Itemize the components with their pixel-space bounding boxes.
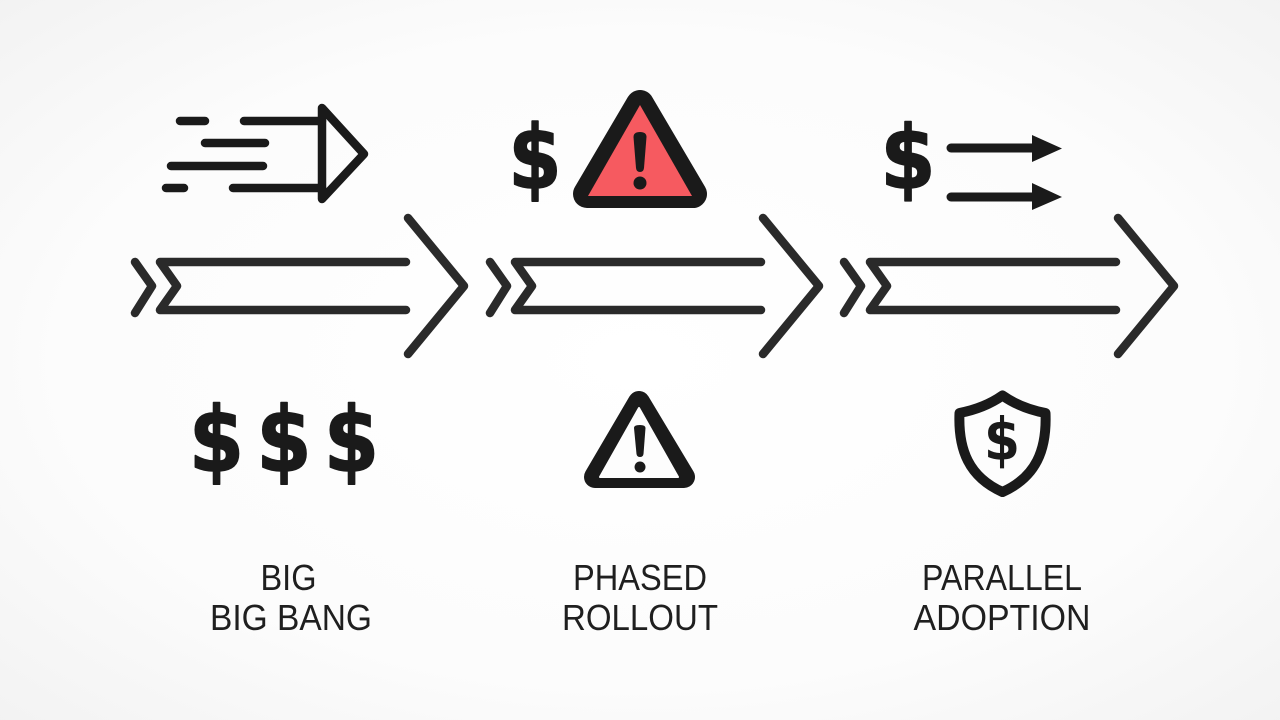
icon: dollar and parallel arrows: [880, 107, 1062, 210]
icon: fast arrow with speed lines: [166, 108, 364, 199]
arrow: parallel adoption stage: [844, 218, 1174, 354]
label: phased rollout: PHASED: [573, 557, 707, 598]
icon: shield with dollar: $: [984, 405, 1020, 474]
icon: shield with dollar: [959, 396, 1046, 492]
icon: dollar and red warning triangle: [508, 104, 693, 209]
label: parallel adoption: PARALLEL: [922, 557, 1082, 598]
arrow: big bang stage: [135, 218, 464, 354]
label: phased rollout: ROLLOUT: [562, 597, 718, 638]
icon: three dollar signs: $: [324, 388, 379, 493]
icon: three dollar signs: $: [189, 388, 244, 493]
label: parallel adoption: ADOPTION: [914, 597, 1090, 638]
icon: dollar and red warning triangle: $: [508, 106, 562, 209]
label: phased rollout: [562, 557, 718, 638]
arrow: phased rollout stage: [490, 218, 819, 354]
icon: three dollar signs: $: [256, 388, 312, 493]
label: big bang: BIG: [260, 557, 316, 598]
icon: outlined warning triangle: [595, 402, 684, 477]
label: big bang: [210, 557, 372, 638]
label: parallel adoption: [914, 557, 1090, 638]
icon: three dollar signs: [189, 388, 379, 493]
label: big bang: BIG BANG: [210, 597, 372, 638]
icon: dollar and parallel arrows: $: [880, 107, 936, 209]
